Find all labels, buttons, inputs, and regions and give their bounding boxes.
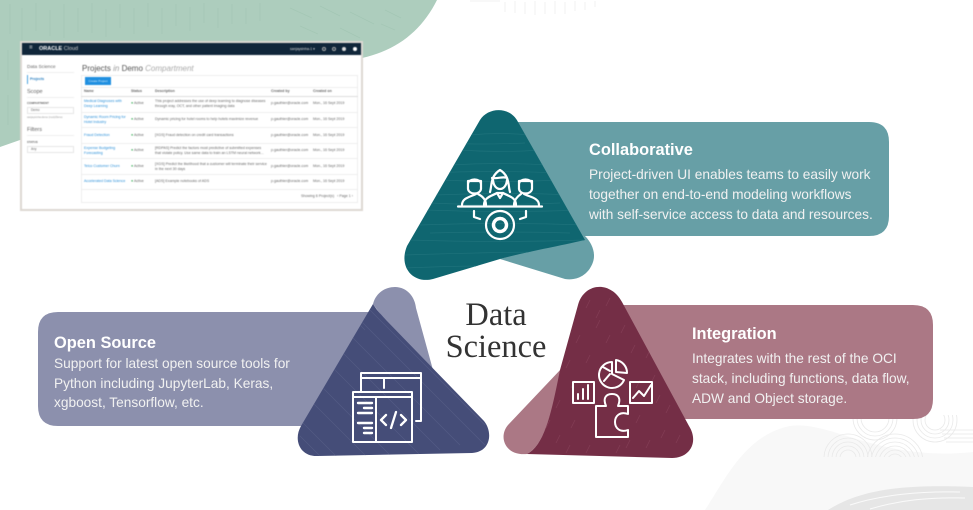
card: integration: Integrates with the rest of the OCI — [692, 351, 897, 366]
title: Data Science: Data — [465, 297, 527, 333]
product screenshot: Demo — [31, 108, 40, 112]
card: collaborative: with self-service access to data and resources. — [589, 207, 873, 222]
product screenshot: Projects in Demo Compartment — [82, 64, 194, 73]
card: collaborative: Collaborative — [589, 141, 693, 159]
product screenshot: p.gauthier@oracle.com — [271, 148, 308, 152]
product screenshot: Create Project — [88, 79, 108, 83]
product screenshot: Telco Customer Churn — [84, 164, 120, 168]
product screenshot: ORACLE Cloud — [39, 46, 78, 52]
triangles and banners — [38, 110, 933, 458]
icon: code windows — [353, 373, 421, 442]
product screenshot: ● Active — [131, 164, 144, 168]
product screenshot: Dynamic Room Pricing for — [84, 115, 126, 119]
product screenshot: Mon., 16 Sept 2019 — [313, 101, 344, 105]
product screenshot: [XGS] Predict the likelihood that a customer will terminate their service — [155, 162, 267, 166]
product screenshot: sanjaysinha-1 ▾ — [290, 46, 315, 50]
product screenshot: Description — [155, 89, 175, 93]
card: open source: Python including JupyterLab, Keras, — [54, 376, 273, 390]
teal triangle — [404, 110, 585, 280]
product screenshot: in the next 30 days — [155, 166, 185, 170]
card: integration: ADW and Object storage. — [692, 391, 847, 406]
product screenshot: STATUS — [27, 140, 38, 144]
product screenshot: p.gauthier@oracle.com — [271, 179, 308, 183]
product screenshot: that violate policy. Use same data to train an LSTM neural network... — [155, 150, 264, 154]
product screenshot: COMPARTMENT — [27, 101, 49, 105]
product screenshot: [XGS] Fraud detection on credit card transactions — [155, 133, 234, 137]
product screenshot: Accelerated Data Science — [84, 179, 125, 183]
product screenshot: Mon., 16 Sept 2019 — [313, 179, 344, 183]
card: open source: Open Source — [54, 334, 156, 352]
product screenshot: Mon., 16 Sept 2019 — [313, 117, 344, 121]
product screenshot: Mon., 16 Sept 2019 — [313, 164, 344, 168]
product screenshot: Projects — [30, 77, 44, 81]
product screenshot: Fraud Detection — [84, 133, 110, 137]
product screenshot: This project addresses the use of deep learning to diagnose diseases — [155, 99, 265, 103]
product screenshot: ● Active — [131, 179, 144, 183]
card: collaborative — [589, 141, 873, 222]
product screenshot: Status — [131, 89, 142, 93]
card: integration — [692, 325, 910, 406]
card: open source: Support for latest open source tools for — [54, 356, 290, 371]
pale shape bottom right — [705, 425, 973, 510]
product screenshot: p.gauthier@oracle.com — [271, 117, 308, 121]
card: integration: Integration — [692, 325, 777, 343]
product screenshot: ● Active — [131, 148, 144, 152]
icon: charts and puzzle piece — [573, 360, 652, 437]
product screenshot: Expense Budgeting — [84, 146, 115, 150]
green blob top left — [0, 0, 437, 147]
product screenshot: Forecasting — [84, 150, 103, 154]
product screenshot: Data Science — [27, 65, 56, 70]
product screenshot: [ADS] Example notebooks of ADS — [155, 179, 209, 183]
card: integration: stack, including functions, data flow, — [692, 371, 910, 386]
title: Data Science: Science — [446, 329, 546, 365]
product screenshot: Scope — [27, 89, 43, 95]
product screenshot: p.gauthier@oracle.com — [271, 101, 308, 105]
product screenshot: Medical Diagnoses with — [84, 99, 122, 103]
product screenshot: ● Active — [131, 133, 144, 137]
product screenshot: Mon., 16 Sept 2019 — [313, 133, 344, 137]
card: collaborative: Project-driven UI enables teams to easily work — [589, 167, 870, 182]
product screenshot: through xray, OCT, and other patient imaging data — [155, 104, 234, 108]
product screenshot: p.gauthier@oracle.com — [271, 133, 308, 137]
product screenshot: sanjaysinha-demo (root)/Demo — [27, 116, 63, 119]
product screenshot: ● Active — [131, 101, 144, 105]
product screenshot: Showing 6 Project(s) ‹ Page 1 › — [301, 194, 353, 198]
screenshot header bar — [22, 43, 361, 55]
panel: open source banner — [38, 287, 433, 426]
product screenshot: Name — [84, 89, 94, 93]
product screenshot: Filters — [27, 127, 42, 133]
icon: team around gear — [458, 170, 542, 239]
title: Data Science — [446, 297, 546, 365]
product screenshot: Any — [31, 147, 36, 151]
product screenshot: Created on — [313, 89, 332, 93]
slate triangle — [298, 304, 489, 470]
maroon triangle — [527, 287, 693, 458]
product screenshot: [RDPAS] Predict the factors most predictive of submitted expenses — [155, 146, 261, 150]
card: collaborative: together on end-to-end modeling workflows — [589, 187, 852, 202]
product screenshot: ● Active — [131, 117, 144, 121]
product screenshot: Mon., 16 Sept 2019 — [313, 148, 344, 152]
product screenshot: Hotel Industry — [84, 120, 106, 124]
panel: collaborative banner — [500, 122, 889, 279]
product screenshot — [20, 41, 363, 211]
product screenshot: ≡ — [29, 45, 33, 51]
texture top centre — [470, 1, 595, 15]
card: open source: xgboost, Tensorflow, etc. — [54, 395, 204, 410]
panel: integration banner — [504, 305, 933, 454]
dark arcs bottom right — [828, 486, 973, 510]
arc pattern bottom right — [824, 415, 973, 457]
product screenshot: Dynamic pricing for hotel rooms to help hotels maximize revenue — [155, 117, 258, 121]
card: open source — [54, 334, 290, 410]
product screenshot: p.gauthier@oracle.com — [271, 164, 308, 168]
product screenshot: Created by — [271, 89, 290, 93]
product screenshot: Deep Learning — [84, 104, 108, 108]
